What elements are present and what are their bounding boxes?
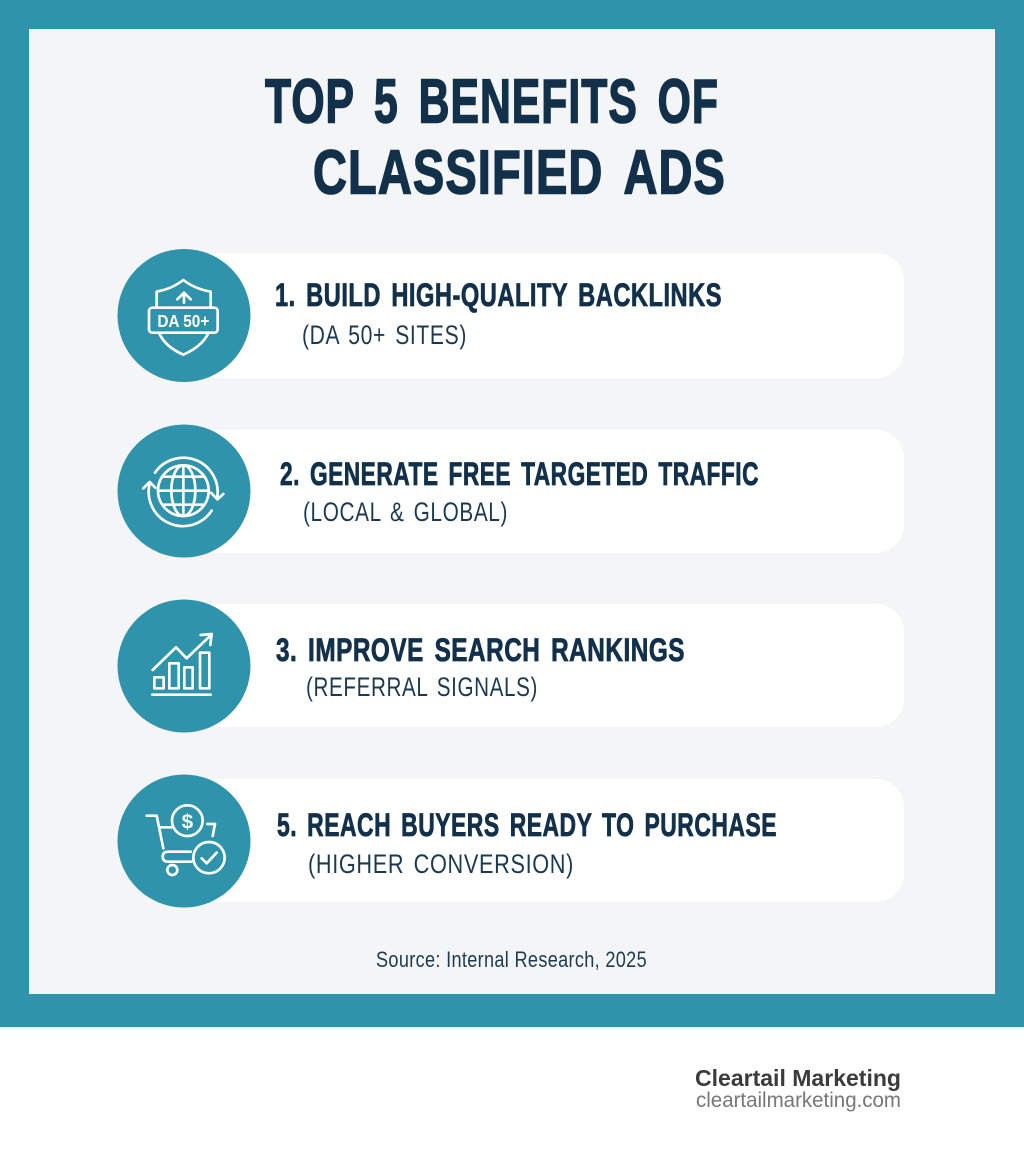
panel: benefit 5 (118, 774, 904, 908)
benefit 2 heading: 2. GENERATE FREE TARGETED TRAFFIC (280, 456, 759, 492)
benefit 3 heading: 3. IMPROVE SEARCH RANKINGS (276, 632, 685, 668)
brand footer: cleartailmarketing.com (696, 1089, 901, 1112)
source note: Source: Internal Research, 2025 (376, 947, 647, 972)
benefit 5 heading: 5. REACH BUYERS READY TO PURCHASE (277, 807, 777, 843)
benefit 1 subtext: (DA 50+ SITES) (302, 320, 467, 350)
panel: benefit 2 (118, 424, 904, 558)
benefit 5 subtext: (HIGHER CONVERSION) (308, 849, 574, 879)
title (265, 68, 726, 208)
icon: cart with coin and check: $ (182, 810, 194, 833)
panel: benefit 1 (118, 249, 904, 382)
icon: rising bar chart (152, 634, 212, 695)
title: CLASSIFIED ADS (313, 138, 726, 208)
panel: benefit 3 (118, 600, 904, 732)
icon: shield DA 50+: DA 50+ (157, 311, 209, 331)
brand footer: Cleartail Marketing (695, 1065, 901, 1091)
icon: globe with arrows (143, 458, 223, 526)
title: TOP 5 BENEFITS OF (265, 68, 719, 136)
icon: shield DA 50+ (149, 280, 218, 355)
benefit 1 heading: 1. BUILD HIGH-QUALITY BACKLINKS (275, 277, 722, 313)
benefit 3 subtext: (REFERRAL SIGNALS) (306, 672, 538, 702)
icon: cart with coin and check (147, 805, 225, 875)
inner panel background (29, 29, 995, 994)
brand footer (695, 1065, 901, 1112)
benefit 2 subtext: (LOCAL & GLOBAL) (303, 497, 508, 527)
